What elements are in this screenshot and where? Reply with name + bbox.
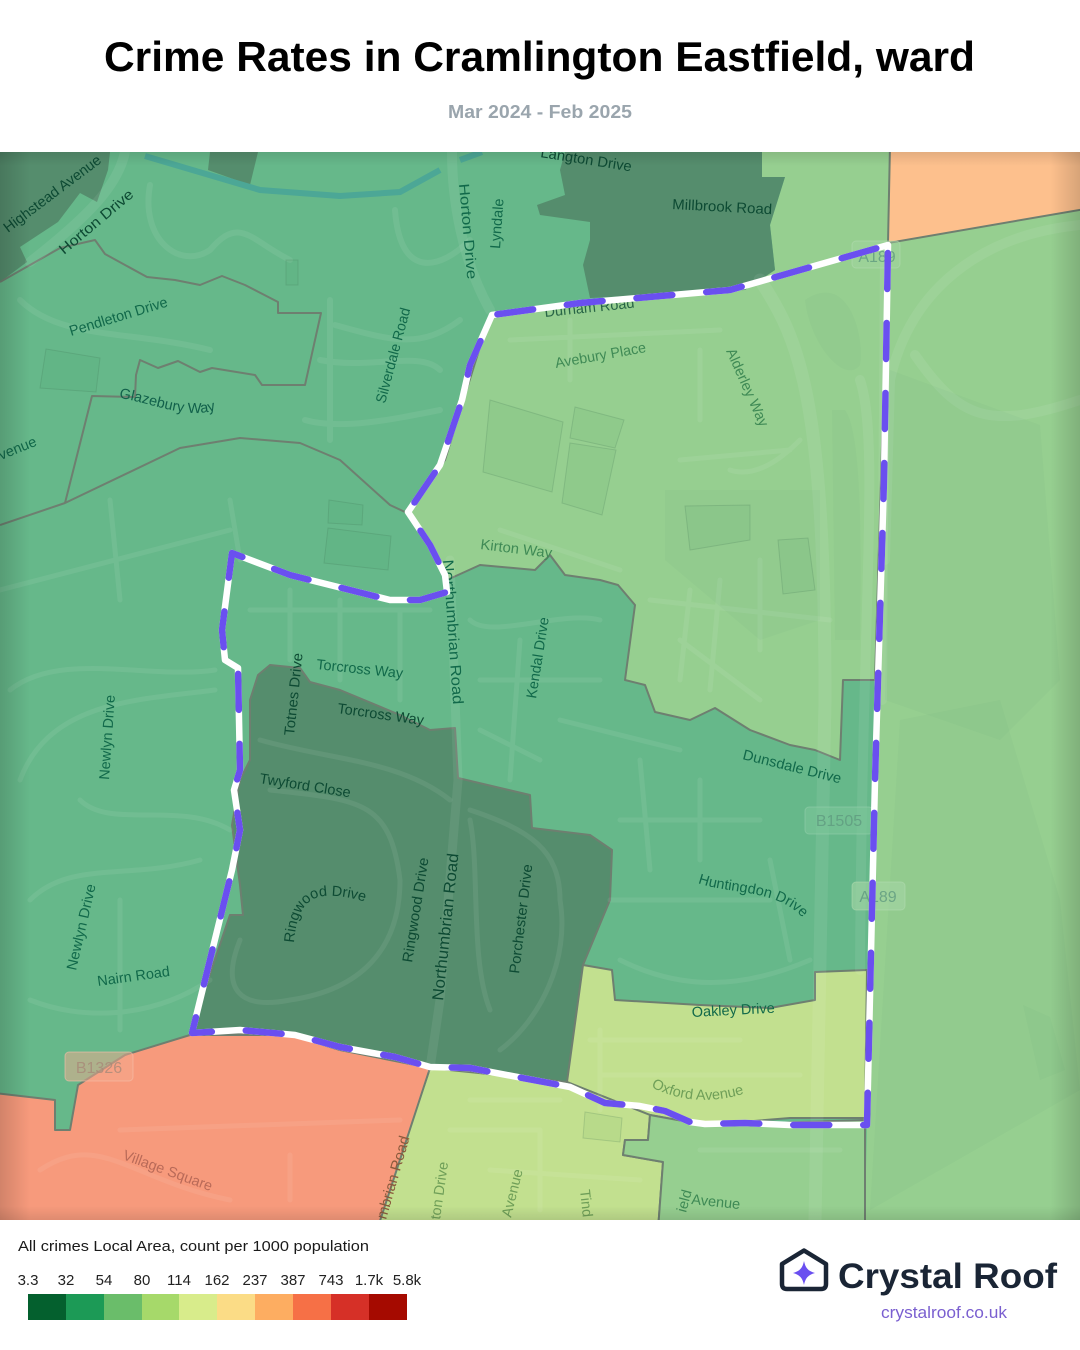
region: light green Avebury [410, 245, 888, 760]
shield A189 top: A189 [858, 249, 896, 266]
street labels: Porchester Drive [507, 863, 536, 974]
region: orange north east [888, 145, 1080, 243]
region: light green south [623, 1115, 865, 1230]
legend scale labels: 387 [280, 1272, 306, 1289]
icon: house with star [782, 1250, 826, 1289]
legend title: All crimes Local Area, count per 1000 population [18, 1238, 369, 1255]
street labels: Horton Drive [56, 187, 137, 258]
street labels: Dunsdale Drive [741, 747, 843, 787]
internal ward boundaries [0, 240, 405, 525]
street labels: Silverdale Road [373, 306, 414, 405]
legend scale labels: 5.8k [393, 1272, 422, 1289]
legend colour bar [28, 1294, 407, 1320]
street labels: Highstead Avenue [1, 152, 105, 236]
street labels: Tind [576, 1189, 595, 1218]
ward boundary: white base with purple dashes [192, 245, 888, 1125]
street labels: Torcross Way [336, 701, 426, 729]
logo wordmark: Crystal Roof [838, 1257, 1057, 1296]
street labels: Oakley Drive [691, 1001, 775, 1021]
sports pitches and parks [40, 260, 815, 1142]
shield B1505: B1505 [816, 813, 862, 830]
street labels: Alderley Way [722, 346, 771, 430]
title: Crime Rates in Cramlington Eastfield, ward [104, 33, 975, 80]
logo: Crystal Roof [782, 1250, 1057, 1322]
legend scale labels: 162 [204, 1272, 230, 1289]
roadside darker patches east [928, 700, 1062, 1080]
street labels: Newlyn Drive [97, 694, 119, 780]
street labels: Nairn Road [96, 964, 171, 990]
region: salmon Village Square [0, 1035, 430, 1230]
street labels: Ringwood Drive [284, 885, 366, 942]
legend scale labels: 237 [242, 1272, 268, 1289]
shield A189 top [852, 241, 900, 268]
legend scale labels: 54 [96, 1272, 112, 1289]
street labels: Lyndale [488, 198, 507, 249]
street labels: Huntingdon Drive [699, 874, 806, 916]
street labels: Oxford Avenue [653, 1080, 743, 1100]
legend scale labels: 1.7k [355, 1272, 384, 1289]
shield B1505 [805, 807, 873, 834]
legend scale labels [18, 1272, 422, 1289]
street labels: Avenue [499, 1168, 527, 1219]
subtitle: date range: Mar 2024 - Feb 2025 [448, 101, 632, 122]
map base: mid green area [0, 152, 875, 1168]
street labels: Village Square [121, 1148, 214, 1195]
region: pale green south [375, 1068, 663, 1230]
street labels: Avenue [691, 1192, 741, 1213]
street labels: Avebury Place [554, 340, 647, 372]
street labels: Twyford Close [258, 771, 352, 801]
website link text: crystalroof.co.uk [881, 1303, 1008, 1322]
river [145, 152, 482, 196]
legend scale labels: 3.3 [18, 1272, 38, 1289]
street labels: Torcross Way [316, 657, 405, 682]
shield B1326: B1326 [76, 1060, 122, 1077]
street labels: Kirton Way [480, 537, 554, 562]
street labels: Pendleton Drive [67, 295, 170, 340]
shield A189 mid: A189 [859, 889, 897, 906]
road network [0, 152, 890, 1202]
street labels: ton Drive [428, 1161, 452, 1221]
street labels: Newlyn Drive [64, 883, 100, 972]
region: dark green Millbrook [537, 152, 785, 298]
legend [18, 1238, 422, 1320]
street labels: Millbrook Road [672, 197, 772, 218]
street labels: Durham Road [544, 296, 635, 321]
street labels: Totnes Drive [282, 652, 307, 736]
street labels [0, 152, 870, 1219]
street labels: Northumbrian Road [430, 852, 462, 1001]
shield A189 mid [852, 882, 905, 910]
region: dark green central [190, 665, 612, 1082]
street labels: Glazebury Way [120, 388, 214, 415]
map edge vignette [0, 152, 1080, 1220]
region: pale green Oxford Avenue [567, 965, 867, 1125]
legend scale labels: 32 [58, 1272, 74, 1289]
street labels: Langton Drive [539, 145, 633, 175]
street labels: mbrian Road [374, 1134, 414, 1221]
region: dark green north west [0, 152, 110, 282]
street labels: ield [674, 1188, 696, 1214]
road shields [65, 241, 905, 1081]
street labels: Ringwood Drive [400, 856, 433, 964]
legend scale labels: 80 [134, 1272, 150, 1289]
legend scale labels: 114 [167, 1272, 191, 1289]
shield B1326 [65, 1052, 133, 1081]
street labels: Kendal Drive [524, 616, 553, 700]
region: light green east [730, 152, 1080, 1220]
street labels: Northumbrian Road [439, 559, 466, 705]
street labels: Horton Drive [455, 183, 479, 280]
legend scale labels: 743 [318, 1272, 344, 1289]
